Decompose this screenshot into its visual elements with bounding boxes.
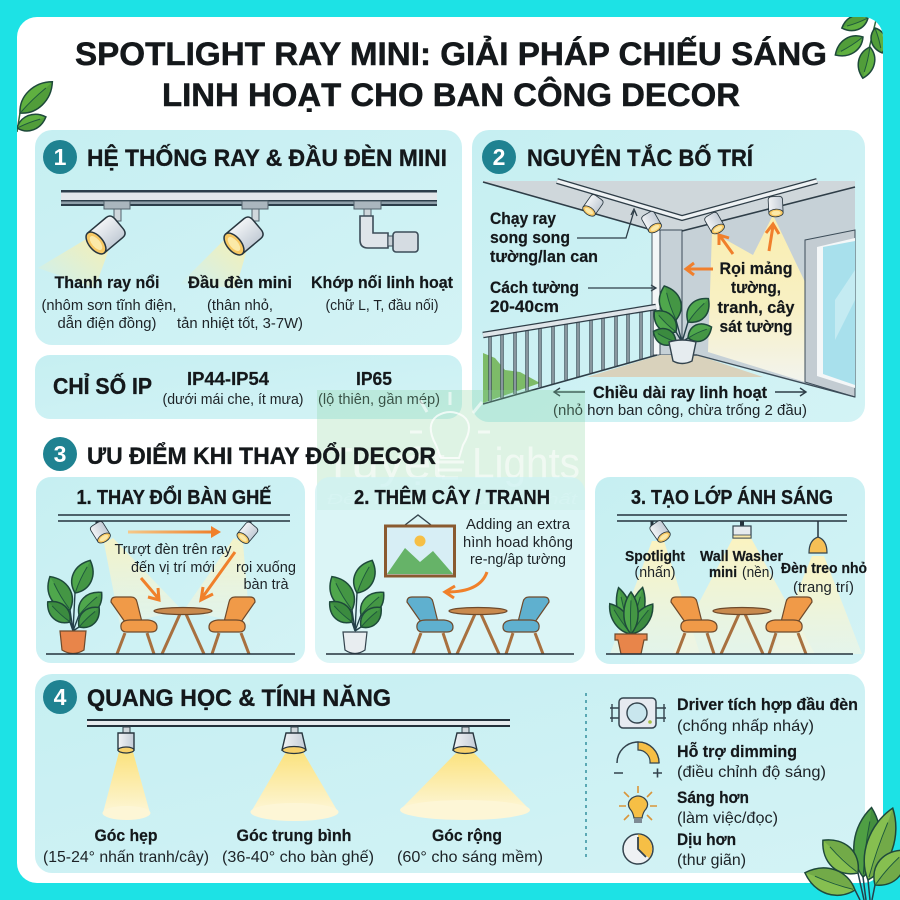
note: cach tuong [490, 278, 579, 316]
subheading: 2. THÊM CÂY / TRANH [354, 485, 550, 509]
icon: bulb [619, 786, 657, 823]
label: thanh ray: (nhôm sơn tĩnh điện, [42, 297, 176, 314]
panel: IP rating [35, 355, 462, 419]
rail [58, 515, 290, 521]
panel: 1 track system [35, 130, 462, 345]
label wide [397, 826, 543, 866]
panel: 2 layout principles [472, 130, 865, 422]
text: bright: Sáng hơn [677, 788, 749, 807]
note: picture: hình hoad không [463, 534, 573, 551]
furniture [111, 597, 255, 654]
note: roi mang: tường, [731, 278, 781, 297]
title: LINH HOẠT CHO BAN CÔNG DECOR [162, 75, 740, 113]
label: dau den: (thân nhỏ, [207, 297, 273, 314]
heading 4: QUANG HỌC & TÍNH NĂNG [87, 684, 391, 712]
label: khop noi: (chữ L, T, đầu nối) [326, 297, 438, 314]
slide arrow [128, 526, 221, 538]
note: chieu dai: Chiều dài ray linh hoạt [593, 383, 767, 402]
text: driver: (chống nhấp nháy) [677, 718, 814, 735]
note: chay ray: song song [490, 228, 570, 247]
heading 3: ƯU ĐIỂM KHI THAY ĐỔI DECOR [87, 442, 436, 470]
beams [104, 538, 250, 625]
icon: driver [610, 698, 666, 728]
icon: clock [623, 834, 653, 864]
furniture [407, 597, 549, 654]
wall washer [733, 521, 751, 538]
IP44: IP44-IP54 [187, 369, 269, 389]
label: thanh ray [42, 273, 176, 332]
note: cach tuong: 20-40cm [490, 297, 559, 316]
label medium: (36-40° cho bàn ghế) [222, 849, 374, 866]
note: chieu dai: (nhỏ hơn ban công, chừa trống 2 đầu) [553, 402, 807, 419]
label wide: Góc rộng [432, 826, 502, 845]
plant [323, 556, 390, 654]
watermark: Lights [472, 439, 580, 488]
pointer arrows [141, 552, 235, 600]
orange arrows [686, 224, 779, 275]
balcony scene [483, 181, 855, 404]
furniture [671, 597, 812, 654]
note: roi mang: tranh, cây [718, 298, 795, 317]
panel: add plant / art [315, 477, 585, 663]
badge 4: 4 [54, 684, 67, 710]
IP65 [318, 369, 440, 408]
label narrow: (15-24° nhấn tranh/cây) [43, 849, 209, 866]
note: chay ray [490, 209, 598, 266]
text: dimming [677, 742, 826, 781]
curved arrow [445, 572, 487, 598]
leader lines [577, 209, 656, 291]
label: thanh ray: Thanh ray nổi [54, 273, 160, 292]
track rail [61, 190, 437, 206]
rail [617, 515, 847, 521]
label: khop noi: Khớp nối linh hoạt [311, 273, 453, 292]
subheading: 3. TẠO LỚP ÁNH SÁNG [631, 485, 833, 509]
badge 2 [482, 140, 516, 174]
floor [326, 653, 574, 655]
lamps [89, 520, 259, 546]
floor [46, 653, 295, 655]
note: picture: Adding an extra [466, 516, 571, 533]
text: soft: Dịu hơn [677, 830, 736, 849]
panel: light layers [595, 477, 867, 664]
subheading: 1. THAY ĐỔI BÀN GHẾ [76, 485, 272, 509]
IP65: IP65 [356, 369, 392, 389]
spotlight head 1 [82, 201, 130, 257]
framed picture [386, 515, 454, 576]
title [75, 35, 827, 113]
text: driver: Driver tích hợp đầu đèn [677, 695, 858, 714]
panel: change furniture [36, 477, 305, 663]
text: soft: (thư giãn) [677, 852, 746, 869]
note: slide: đến vị trí mới [131, 559, 215, 576]
label spotlight: (nhấn) [634, 564, 676, 581]
heading 1: HỆ THỐNG RAY & ĐẦU ĐÈN MINI [87, 144, 447, 172]
label: dau den: tản nhiệt tốt, 3-7W) [177, 315, 303, 332]
text: dimming: Hỗ trợ dimming [677, 742, 797, 761]
note: picture: re-ng/âp tường [470, 551, 566, 568]
label: dau den: Đầu đèn mini [188, 273, 292, 292]
pendant [809, 521, 827, 553]
note: cach tuong: Cách tường [490, 278, 579, 297]
watermark [317, 390, 585, 510]
label narrow [43, 826, 209, 866]
text: driver [677, 695, 858, 735]
panel: 4 optics and features [35, 674, 865, 873]
floor [606, 653, 853, 655]
label wall washer: mini [709, 564, 737, 581]
note: chieu dai [553, 383, 807, 419]
flexible joint [354, 201, 418, 252]
IP44: (dưới mái che, ít mưa) [162, 391, 304, 408]
text: bright: (làm việc/đọc) [677, 810, 778, 827]
badge 4 [43, 680, 77, 714]
label medium: Góc trung bình [236, 826, 352, 845]
label spotlight: Spotlight [625, 548, 685, 565]
section 3 heading [43, 437, 436, 471]
badge 1: 1 [54, 144, 67, 170]
badge 2: 2 [493, 144, 505, 170]
label pendant [781, 560, 867, 596]
lamps in scene [581, 193, 783, 236]
note: slide [114, 541, 232, 576]
IP44 [162, 369, 304, 408]
note: roi mang [718, 259, 795, 336]
badge 1 [43, 140, 77, 174]
note: chay ray: Chạy ray [490, 209, 556, 228]
narrow beam [102, 727, 150, 820]
note: roi mang: sát tường [720, 317, 792, 336]
watermark: Đèn LED chất lượng nhất [327, 491, 578, 508]
icon: dimming [614, 742, 662, 778]
leaves: bottom right [801, 804, 900, 900]
IP heading: CHỈ SỐ IP [53, 371, 152, 399]
badge 3 [43, 437, 77, 471]
label medium [222, 826, 374, 866]
title: SPOTLIGHT RAY MINI: GIẢI PHÁP CHIẾU SÁNG [75, 35, 827, 72]
note: chay ray: tường/lan can [490, 247, 598, 266]
label pendant: Đèn treo nhỏ [781, 560, 867, 577]
spotlight head 2 [220, 201, 268, 258]
heading 2: NGUYÊN TẮC BỐ TRÍ [527, 144, 754, 172]
note: picture [463, 516, 573, 568]
badge 3: 3 [54, 441, 66, 467]
plant [41, 556, 108, 654]
rail [87, 719, 510, 727]
label: thanh ray: dẫn điện đồng) [58, 315, 156, 332]
note: table: bàn trà [244, 576, 289, 593]
label spotlight [625, 548, 685, 581]
label narrow: Góc hẹp [94, 826, 158, 845]
watermark: Tuyệt [323, 439, 445, 488]
light beams [38, 238, 246, 288]
text: soft [677, 830, 746, 869]
label: khop noi [311, 273, 453, 314]
label wall washer: Wall Washer [700, 548, 783, 565]
leaves: left [17, 81, 54, 132]
potted plant [648, 283, 715, 364]
text: dimming: (điều chỉnh độ sáng) [677, 764, 826, 781]
wide beam [400, 727, 530, 820]
leaves: top right [834, 17, 883, 80]
note: table [236, 559, 296, 593]
IP65: (lộ thiên, gần mép) [318, 391, 440, 408]
note: slide: Trượt đèn trên ray [114, 541, 232, 558]
spotlight [649, 519, 672, 544]
note: table: rọi xuống [236, 559, 296, 576]
label wall washer [700, 548, 783, 581]
label wide: (60° cho sáng mềm) [397, 849, 543, 866]
text: bright [677, 788, 778, 827]
label pendant: (trang trí) [793, 579, 854, 596]
note: roi mang: Rọi mảng [720, 259, 792, 278]
label: dau den [177, 273, 303, 332]
plant [604, 586, 659, 654]
beams [610, 538, 862, 654]
medium beam [250, 727, 338, 821]
label wall washer: (nền) [742, 564, 774, 581]
